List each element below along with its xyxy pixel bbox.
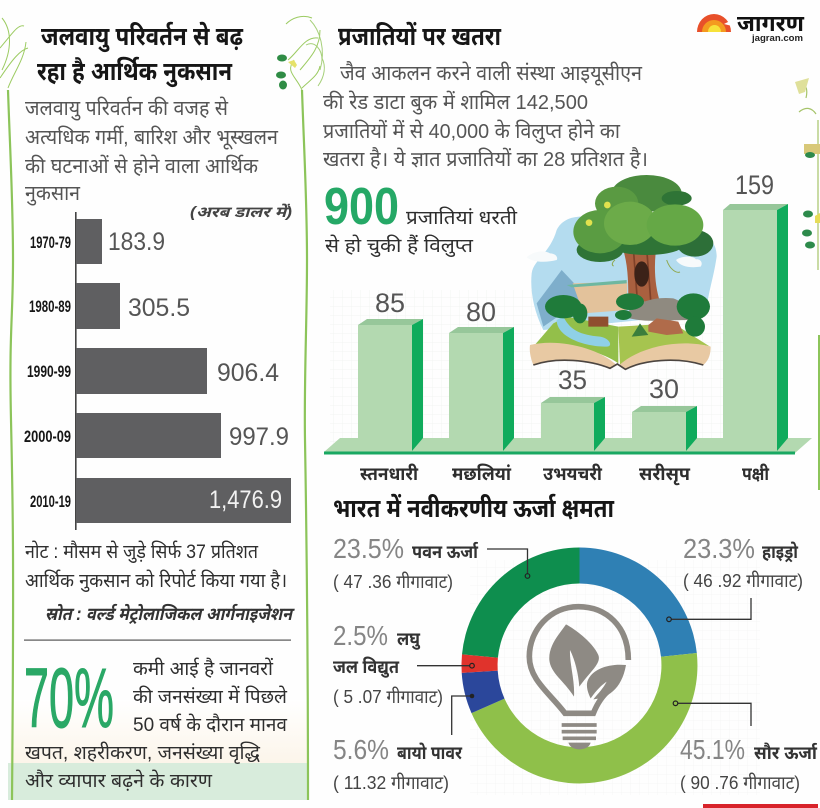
segment: bio power: [462, 671, 504, 713]
callout: wind energy: 23.5%: [333, 533, 404, 564]
bar: mammals 85: [358, 288, 423, 484]
illustration: tree growing from open book: [527, 175, 717, 369]
segment: wind: [462, 548, 580, 658]
text block: IUCN red data book: प्रजातियों में से 40,000 के विलुप्त होने का: [323, 119, 621, 144]
bar: 1970-79: 183.9: [108, 228, 165, 256]
callout: hydro: 23.3%: [683, 533, 755, 564]
text block: IUCN red data book: जैव आकलन करने वाली संस्था आइयूसीएन: [340, 60, 643, 86]
text block: climate intro: नुकसान: [25, 182, 81, 206]
note: [25, 540, 287, 593]
icon: light bulb with leaves: [529, 607, 628, 749]
bar: birds 159: 159: [735, 170, 774, 200]
logo: Jagran: jagran.com: [751, 33, 803, 43]
heading: climate economic loss: जलवायु परिवर्तन से बढ़: [41, 21, 244, 52]
callout: bio power: [333, 694, 474, 793]
bar: fish 80: [449, 297, 514, 484]
segment: hydro: [580, 548, 697, 657]
text block: IUCN red data book: खतरा है। ये ज्ञात प्रजातियों का 28 प्रतिशत है।: [323, 146, 648, 171]
callout: wind energy: पवन ऊर्जा: [412, 541, 479, 562]
callout: solar: सौर ऊर्जा: [754, 742, 818, 763]
callout: wind energy: [333, 533, 530, 592]
bar: 1990-99: 1990-99: [27, 362, 71, 381]
segment: small hydro: [461, 654, 498, 673]
decorative vine: left panel left side: [0, 18, 28, 800]
callout: hydro: [667, 533, 803, 622]
bar: birds 159: [723, 170, 788, 484]
callout: solar: 45.1%: [680, 734, 745, 765]
unit label: billion dollars: (अरब डालर में): [190, 203, 292, 221]
callout: solar: ( 90 .76 गीगावाट): [680, 773, 800, 793]
callout: 900 species extinct: [324, 178, 518, 258]
text block: climate intro: जलवायु परिवर्तन की वजह से: [25, 96, 229, 121]
bar: 1970-79: [30, 219, 165, 264]
callout: 900 species extinct: 900: [324, 178, 399, 236]
callout: bio power: ( 11.32 गीगावाट): [333, 773, 449, 793]
text block: population decline: की जनसंख्या में पिछले: [133, 685, 288, 708]
bar: 1980-89: 1980-89: [29, 297, 71, 316]
heading: species at risk: प्रजातियों पर खतरा: [338, 21, 502, 51]
chart floor: [324, 438, 812, 454]
bar: 2010-19: 2010-19: [30, 492, 71, 511]
decorative vine: right edge: [795, 78, 820, 490]
bar: 2000-09: 997.9: [229, 423, 289, 451]
logo: Jagran: जागरण: [737, 11, 805, 36]
callout: small hydro: ( 5 .07 गीगावाट): [333, 687, 443, 707]
callout: 900 species extinct: से हो चुकी हैं विलुप्त: [325, 234, 474, 258]
text block: population decline: 50 वर्ष के दौरान मानव: [133, 713, 288, 736]
text block: IUCN red data book: [323, 60, 648, 171]
bar: 2010-19: [30, 478, 291, 523]
bar: amphibians 35: उभयचरी: [543, 464, 603, 484]
text block: population decline: [25, 657, 288, 792]
callout: small hydro: [333, 620, 474, 707]
bar: 1980-89: [29, 283, 190, 329]
bar: 1990-99: 906.4: [217, 359, 279, 387]
callout: small hydro: लघु: [397, 629, 421, 650]
logo: Jagran: [697, 11, 805, 43]
bar: mammals 85: 85: [375, 288, 405, 318]
text block: climate intro: [25, 96, 279, 206]
note: आर्थिक नुकसान को रिपोर्ट किया गया है।: [25, 569, 287, 593]
bar: 2000-09: [24, 413, 289, 458]
bar: reptiles 30: 30: [649, 374, 679, 404]
callout: 900 species extinct: प्रजातियां धरती: [406, 207, 518, 229]
heading: climate economic loss: [37, 21, 244, 87]
bar: amphibians 35: 35: [558, 365, 587, 395]
heading: climate economic loss: रहा है आर्थिक नुकसान: [37, 56, 233, 87]
callout: small hydro: जल विद्युत: [333, 657, 400, 678]
text block: climate intro: अत्यधिक गर्मी, बारिश और भूस्खलन: [25, 125, 279, 150]
bar: 1970-79: 1970-79: [30, 233, 71, 252]
donut chart: renewable energy: [461, 548, 697, 783]
text block: population decline: खपत, शहरीकरण, जनसंख्या वृद्धि: [25, 742, 260, 765]
text block: IUCN red data book: की रेड डाटा बुक में शामिल 142,500: [323, 90, 588, 115]
bar chart: extinct species: [358, 170, 788, 485]
callout: wind energy: ( 47 .36 गीगावाट): [333, 572, 453, 592]
bar: reptiles 30: [632, 374, 697, 485]
bar: fish 80: मछलियां: [452, 464, 512, 484]
decorative vine: centre top: [306, 20, 324, 86]
bar: 2010-19: 1,476.9: [209, 486, 282, 514]
callout: small hydro: 2.5%: [333, 620, 388, 651]
bar: reptiles 30: सरीसृप: [639, 464, 691, 485]
text block: climate intro: की घटनाओं से होने वाला आर्थिक: [25, 154, 259, 178]
segment: solar: [472, 653, 697, 783]
callout: hydro: हाइड्रो: [762, 542, 799, 563]
bar: 1980-89: 305.5: [128, 294, 190, 322]
bar: mammals 85: स्तनधारी: [360, 464, 419, 484]
callout: bio power: बायो पावर: [397, 743, 463, 763]
bar: 1990-99: [27, 348, 279, 394]
decorative vine: left panel right side: [276, 16, 320, 800]
source: स्रोत : वर्ल्ड मेट्रोलाजिकल आर्गनाइजेशन: [45, 603, 296, 625]
callout: bio power: 5.6%: [333, 734, 389, 765]
bar: birds 159: पक्षी: [742, 464, 770, 484]
bar: 2000-09: 2000-09: [24, 427, 71, 446]
text block: population decline: और व्यापार बढ़ने के कारण: [25, 769, 213, 792]
bar chart: economic losses by decade: [24, 212, 291, 530]
callout: hydro: ( 46 .92 गीगावाट): [683, 571, 803, 591]
bar: fish 80: 80: [466, 297, 496, 327]
heading: India renewable capacity: भारत में नवीकरणीय ऊर्जा क्षमता: [333, 493, 615, 523]
big number: 70%: 70%: [24, 651, 114, 745]
note: नोट : मौसम से जुड़े सिर्फ 37 प्रतिशत: [25, 540, 259, 564]
bar: amphibians 35: [541, 365, 605, 484]
callout: solar: [673, 701, 818, 793]
text block: population decline: कमी आई है जानवरों: [133, 657, 274, 680]
